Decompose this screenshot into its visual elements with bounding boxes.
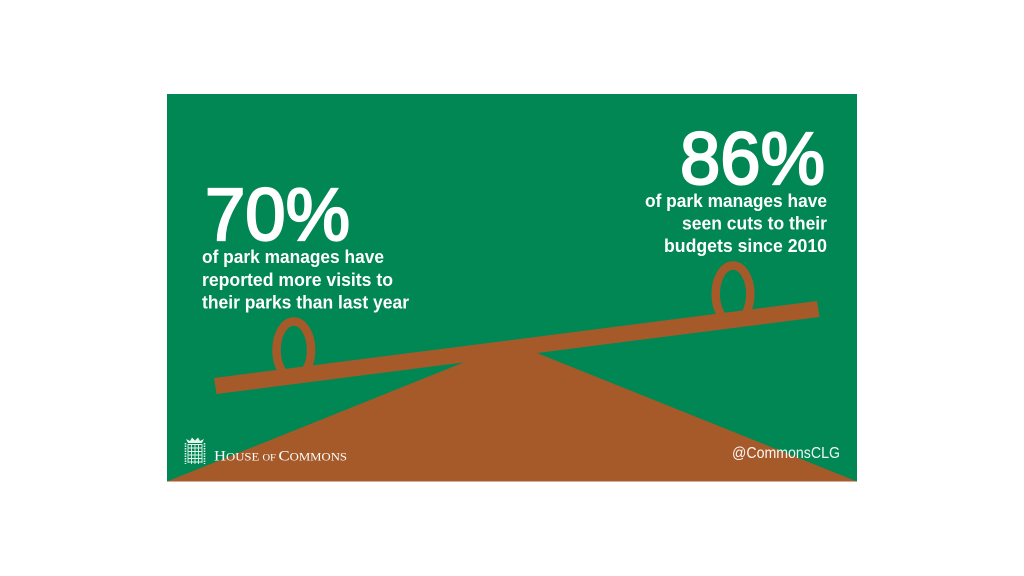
statistic: 86%: 86% xyxy=(680,117,825,200)
text block: left statement: reported more visits to xyxy=(202,270,393,290)
wordmark: HOUSE OF COMMONS xyxy=(214,448,347,464)
text block: left statement: of park manages have xyxy=(202,247,384,267)
seesaw plank xyxy=(214,301,820,394)
social handle: @CommonsCLG xyxy=(732,445,840,462)
logo: House of Commons xyxy=(186,438,347,464)
panel: green background xyxy=(167,94,857,482)
text block: left statement xyxy=(202,247,409,312)
text block: right statement: budgets since 2010 xyxy=(664,236,827,256)
statistic: 70%: 70% xyxy=(205,173,350,256)
text block: right statement: of park manages have xyxy=(645,191,827,211)
icon: portcullis xyxy=(186,438,204,464)
text block: left statement: their parks than last year xyxy=(202,292,409,312)
text block: right statement xyxy=(645,191,827,256)
icon: left seat loop xyxy=(276,322,311,378)
icon: right seat loop xyxy=(716,266,750,322)
text block: right statement: seen cuts to their xyxy=(682,214,827,234)
seesaw fulcrum xyxy=(167,343,857,482)
